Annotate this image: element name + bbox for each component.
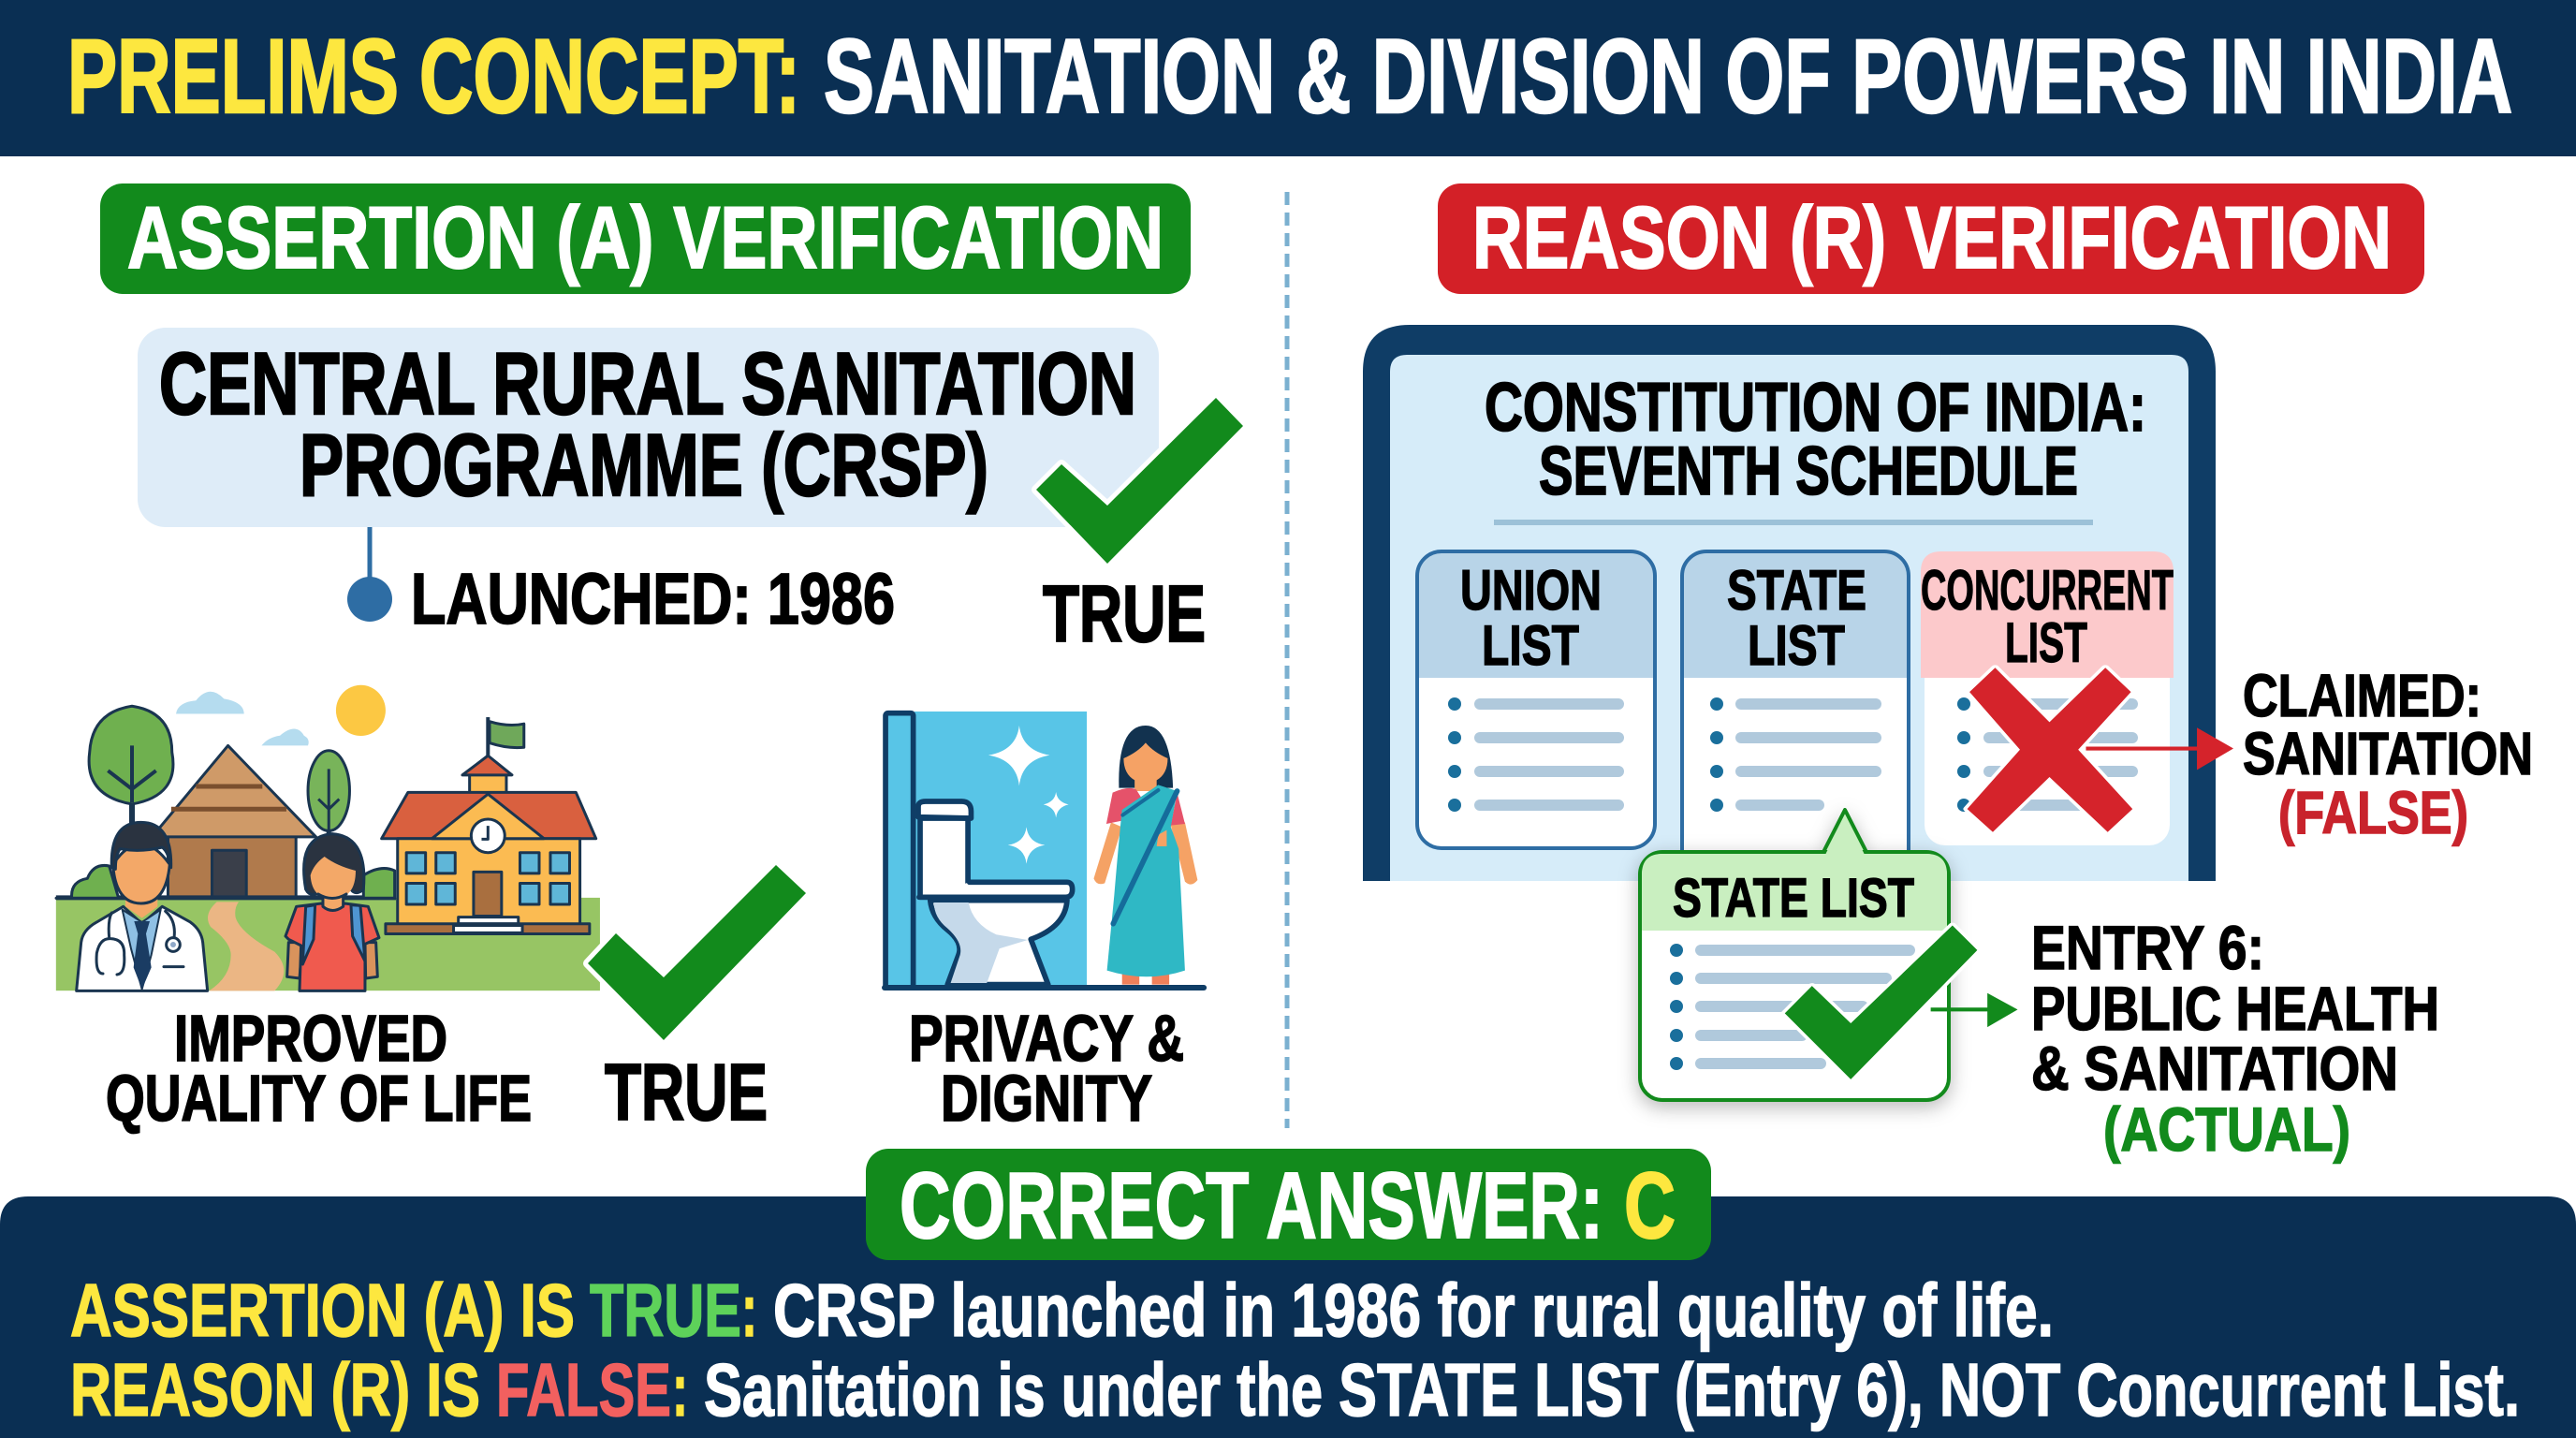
- card: state list: LIST: [1748, 614, 1845, 677]
- callout: state list card: STATE LIST: [1673, 868, 1914, 929]
- icon: toilet and woman: [885, 712, 1204, 988]
- schedule title: SEVENTH SCHEDULE: [1539, 433, 2078, 509]
- label: entry 6 actual: [2031, 913, 2439, 1164]
- label: claimed sanitation false: CLAIMED:: [2243, 662, 2481, 729]
- label: entry 6 actual: & SANITATION: [2031, 1034, 2398, 1103]
- panel: answer summary: [0, 1149, 2576, 1438]
- correct answer badge: C: [1624, 1153, 1676, 1258]
- summary line: assertion: [70, 1269, 2054, 1352]
- arrow: green: [1931, 993, 2018, 1027]
- icon: check mark 2: [588, 865, 806, 1040]
- icon: check mark 1: [1036, 398, 1243, 564]
- panel: reason verification: [1363, 183, 2533, 1164]
- summary line: reason: REASON (R) IS: [70, 1348, 480, 1431]
- heading: assertion: ASSERTION (A) VERIFICATION: [127, 188, 1164, 286]
- CRSP title box: PROGRAMME (CRSP): [300, 416, 988, 514]
- icon: village scene: [56, 685, 600, 990]
- label: privacy and dignity: DIGNITY: [941, 1062, 1152, 1135]
- CRSP title box: [138, 328, 1159, 527]
- summary line: assertion: CRSP launched in 1986 for rural quality of life.: [773, 1269, 2054, 1352]
- label: true 1: TRUE: [1043, 570, 1206, 659]
- label: entry 6 actual: (ACTUAL): [2103, 1094, 2350, 1164]
- card: union list: UNION: [1460, 559, 1602, 622]
- card: state list: [1682, 551, 1909, 888]
- arrow: red: [2086, 727, 2233, 770]
- label: privacy and dignity: PRIVACY &: [909, 1002, 1184, 1075]
- card: concurrent list: [1921, 551, 2174, 845]
- label: improved quality of life: QUALITY OF LIFE: [106, 1062, 532, 1135]
- summary line: reason: :: [672, 1348, 688, 1431]
- card: union list: LIST: [1482, 614, 1579, 677]
- icon: red cross: [1968, 668, 2132, 832]
- label: improved quality of life: IMPROVED: [174, 1002, 447, 1075]
- summary line: assertion: :: [741, 1269, 757, 1352]
- summary line: assertion: TRUE: [590, 1269, 741, 1352]
- title: PRELIMS CONCEPT:: [67, 18, 800, 135]
- correct answer badge: CORRECT ANSWER:: [900, 1153, 1603, 1258]
- launched date marker: [347, 527, 895, 639]
- label: claimed sanitation false: [2243, 662, 2533, 846]
- label: entry 6 actual: ENTRY 6:: [2031, 913, 2264, 982]
- icon: green check: [1785, 926, 1977, 1079]
- summary line: assertion: ASSERTION (A) IS: [70, 1269, 575, 1352]
- summary line: reason: FALSE: [496, 1348, 671, 1431]
- label: entry 6 actual: PUBLIC HEALTH: [2031, 974, 2439, 1043]
- card: concurrent list: CONCURRENT: [1921, 559, 2174, 622]
- launched date marker: LAUNCHED: 1986: [411, 559, 895, 639]
- divider between panels: [1284, 192, 1290, 1128]
- callout: state list card: [1640, 810, 1949, 1100]
- CRSP title box: CENTRAL RURAL SANITATION: [159, 334, 1136, 433]
- schedule title: CONSTITUTION OF INDIA:: [1485, 370, 2146, 446]
- card: state list: STATE: [1727, 559, 1866, 622]
- header banner: [0, 0, 2576, 156]
- label: improved quality of life: [106, 1002, 532, 1135]
- label: true 2: TRUE: [605, 1049, 768, 1137]
- title: [67, 18, 2512, 135]
- card: union list: [1417, 551, 1655, 848]
- panel: assertion verification: [56, 183, 1243, 1137]
- schedule title: [1485, 370, 2146, 509]
- label: privacy and dignity: [909, 1002, 1184, 1135]
- label: claimed sanitation false: (FALSE): [2278, 779, 2468, 846]
- card: concurrent list: LIST: [2005, 611, 2087, 674]
- seventh schedule panel: [1363, 325, 2216, 888]
